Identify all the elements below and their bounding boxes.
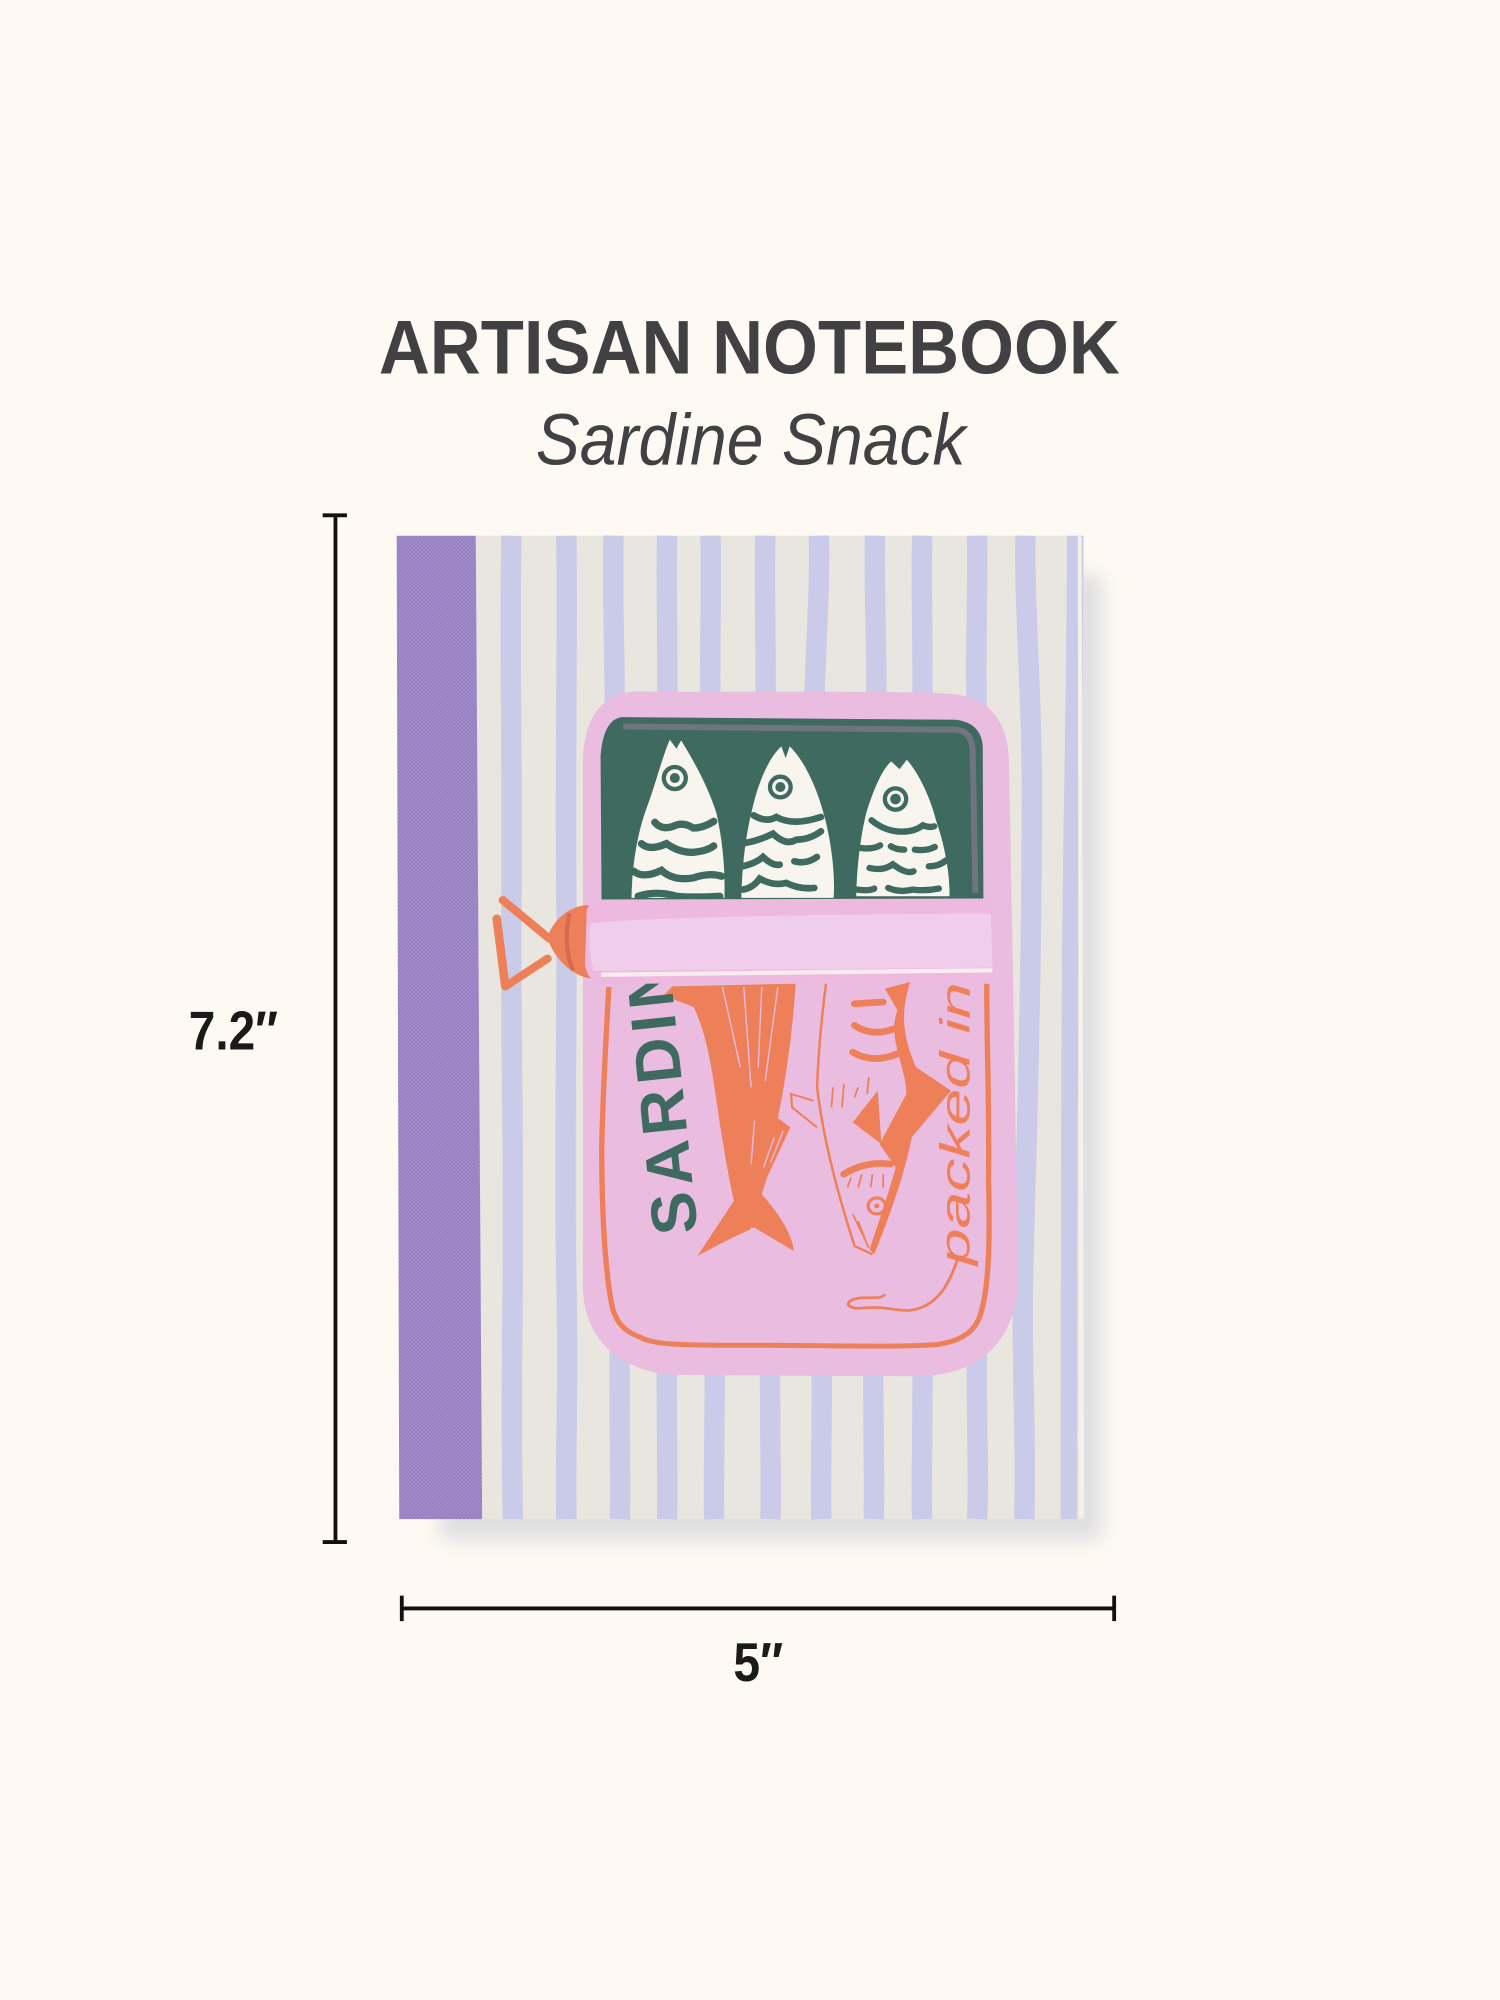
title: ARTISAN NOTEBOOK (379, 306, 1120, 391)
spine (397, 536, 482, 1519)
can label: packed in: packed in (931, 982, 978, 1268)
height dimension line (323, 514, 347, 1543)
cover stripes (511, 536, 1075, 1519)
fish head 2 (741, 746, 834, 898)
pull tab ring (497, 900, 549, 986)
subtitle: Sardine Snack (536, 399, 969, 480)
can label: SARDIN: SARDIN (611, 953, 712, 1238)
fish head 1 (632, 740, 725, 898)
orange inner border (602, 984, 989, 1346)
can lower illustration (602, 982, 989, 1346)
fish head 3 (856, 760, 950, 896)
orange sardine (664, 984, 796, 1256)
outlined sardine (791, 982, 951, 1254)
width dimension line (402, 1596, 1115, 1621)
can window with fish heads (601, 717, 983, 900)
pull tab cap (547, 905, 591, 979)
lid and pull tab (497, 898, 993, 986)
rolled lid (585, 898, 993, 984)
can body (583, 691, 1018, 1376)
sardine can (497, 691, 1018, 1376)
cover background (476, 536, 1083, 1519)
script tail (848, 1258, 958, 1311)
notebook shadow (440, 574, 1102, 1541)
height label: 7.2″ (189, 1000, 278, 1062)
notebook (397, 536, 1084, 1519)
width label: 5″ (733, 1631, 783, 1693)
page edge (1078, 536, 1084, 1519)
